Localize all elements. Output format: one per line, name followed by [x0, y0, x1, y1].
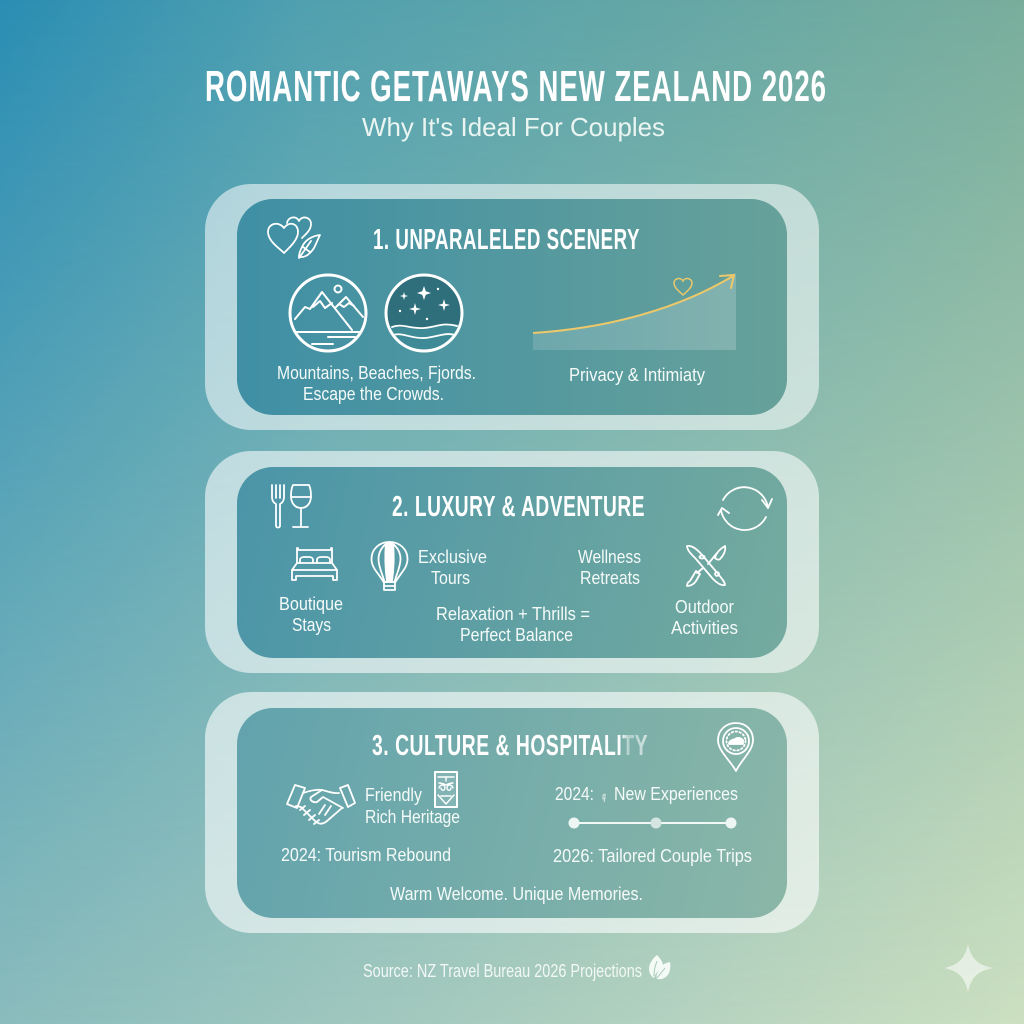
- icon: crossed kayaks: [687, 546, 725, 586]
- panel: luxury and adventure: [205, 451, 819, 673]
- text: outdoor activities: [671, 597, 738, 638]
- text: 2024 new experiences: [555, 784, 738, 804]
- text: mountains beaches: Mountains, Beaches, Fjords.: [277, 363, 476, 383]
- timeline: [568, 818, 736, 828]
- text: tailored couple trips: 2026: Tailored Couple Trips: [553, 846, 752, 866]
- text: wellness retreats: Retreats: [580, 568, 640, 588]
- text: outdoor activities: Outdoor: [675, 597, 734, 617]
- panel: unparaleled scenery: [205, 184, 819, 430]
- chart: rising curve: [533, 273, 736, 350]
- text: 2024 new experiences: New Experiences: [614, 784, 738, 804]
- heading: unparaleled scenery: 1. UNPARALELED SCENERY: [373, 224, 640, 256]
- text: relaxation thrills: [436, 604, 590, 645]
- text: rich heritage: Rich Heritage: [365, 807, 460, 827]
- text: tourism rebound: 2024: Tourism Rebound: [281, 845, 451, 865]
- text: warm welcome: Warm Welcome. Unique Memories.: [390, 884, 643, 904]
- icon: hearts and feather: [268, 217, 320, 258]
- text: boutique stays: [279, 594, 343, 635]
- icon: sparkle: [944, 944, 993, 992]
- panel: culture and hospitality: [205, 692, 819, 933]
- subtitle: Why It's Ideal For Couples: [362, 112, 665, 142]
- icon: maori carving: [435, 772, 457, 807]
- source line: Source: NZ Travel Bureau 2026 Projections: [363, 961, 642, 981]
- text: relaxation thrills: Relaxation + Thrills =: [436, 604, 590, 624]
- text: exclusive tours: Exclusive: [418, 547, 487, 567]
- icon: night sea circle: [384, 274, 464, 352]
- text: relaxation thrills: Perfect Balance: [460, 625, 573, 645]
- icon: bed: [292, 548, 337, 580]
- text: boutique stays: Boutique: [279, 594, 343, 614]
- text: mountains beaches: Escape the Crowds.: [303, 384, 444, 404]
- heading: luxury and adventure: 2. LUXURY & ADVENTURE: [392, 491, 645, 523]
- icon: cycle arrows: [718, 487, 772, 530]
- text: exclusive tours: Tours: [431, 568, 470, 588]
- text: wellness retreats: [578, 547, 641, 588]
- text: 2024 new experiences: 2024:: [555, 784, 594, 804]
- icon: map pin: [718, 723, 753, 771]
- text: friendly: Friendly: [365, 785, 422, 805]
- icon: fork and wine glass: [272, 485, 311, 528]
- icon: hot air balloon: [372, 542, 408, 590]
- text: wellness retreats: Wellness: [578, 547, 641, 567]
- text: outdoor activities: Activities: [671, 618, 738, 638]
- text: privacy: Privacy & Intimiaty: [569, 365, 705, 385]
- icon: mountains circle: [290, 275, 366, 351]
- heading: culture and hospitality: 3. CULTURE & HOSPITALITY: [372, 730, 648, 762]
- text: exclusive tours: [418, 547, 487, 588]
- text: mountains beaches: [277, 363, 476, 404]
- icon: handshake: [287, 785, 355, 824]
- text: boutique stays: Stays: [292, 615, 331, 635]
- icon: leaves: [649, 955, 670, 979]
